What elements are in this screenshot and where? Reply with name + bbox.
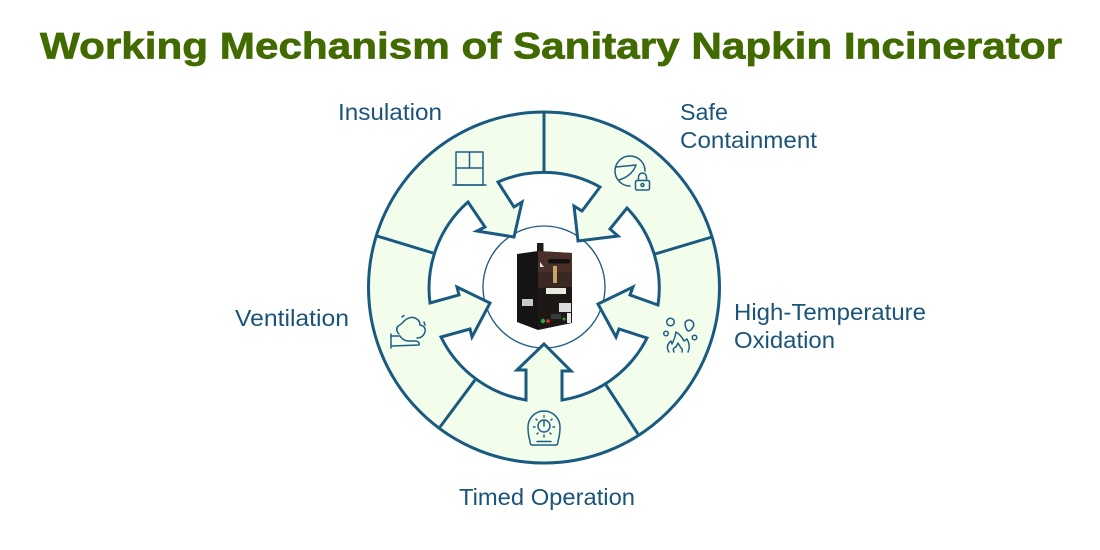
label: High-Temperature Oxidation: High-Temperature	[734, 299, 926, 325]
icon: cloud and hand (ventilation)	[391, 316, 425, 348]
label: Safe Containment: Safe	[680, 99, 728, 125]
label: High-Temperature Oxidation: Oxidation	[734, 327, 835, 353]
icon: window (insulation)	[453, 152, 486, 185]
incinerator machine	[517, 243, 572, 330]
icon: sphere with lock (safe containment)	[615, 156, 650, 190]
segment dividers	[377, 112, 712, 434]
icon: timer dial (timed operation)	[528, 411, 560, 445]
outer ring	[368, 112, 720, 463]
icon: fire with gas bubbles (high-temperature oxidation)	[664, 318, 697, 352]
label: Timed Operation: Timed Operation	[459, 484, 635, 510]
label: Ventilation: Ventilation	[235, 305, 349, 331]
arrow head tips	[457, 202, 633, 371]
arrows outline	[429, 172, 659, 400]
label: Safe Containment: Containment	[680, 127, 818, 153]
cycle diagram	[368, 112, 720, 463]
inner white region	[429, 172, 659, 400]
label: Insulation: Insulation	[338, 99, 442, 125]
title: Working Mechanism of Sanitary Napkin Incinerator	[40, 26, 1062, 66]
center circle	[483, 226, 605, 348]
